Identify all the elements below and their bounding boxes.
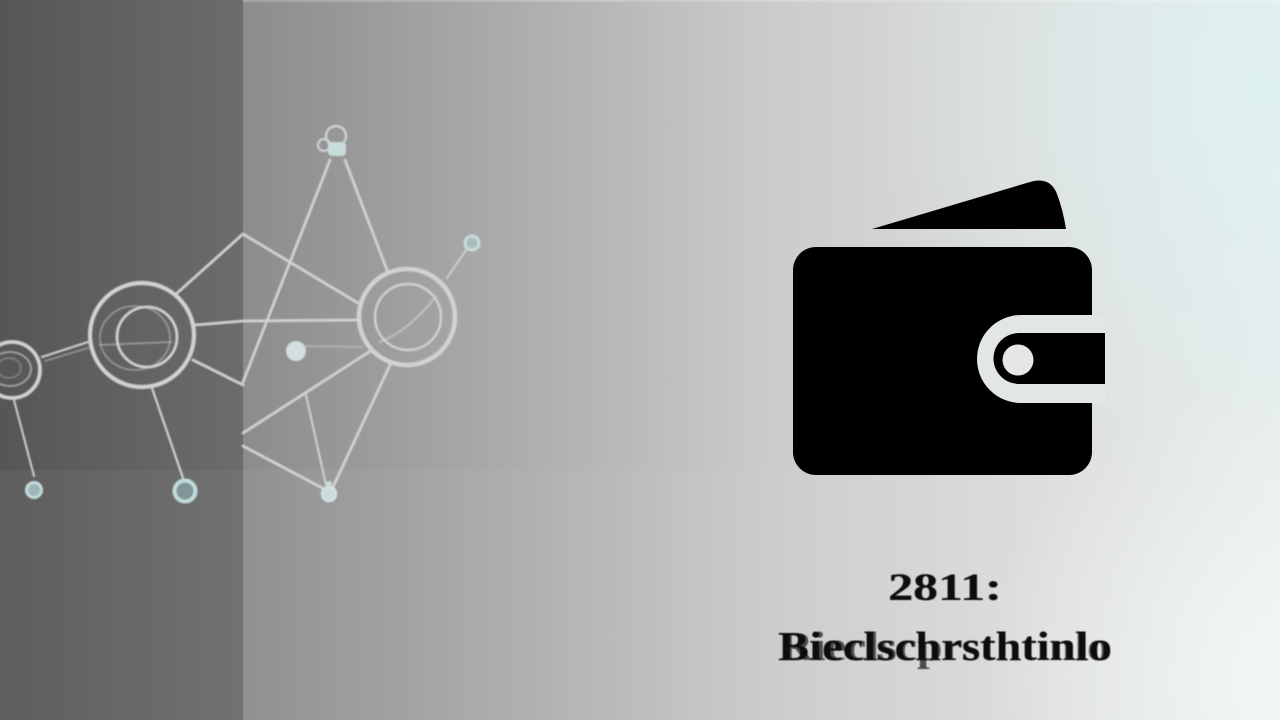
wallet clasp cut-out bbox=[977, 315, 1106, 403]
connecting lines bbox=[14, 160, 466, 490]
wallet clasp tab bbox=[994, 333, 1105, 384]
wallet body bbox=[793, 247, 1092, 475]
year label: 2811: bbox=[889, 566, 1001, 609]
node: bottom right bbox=[322, 481, 336, 501]
node: bottom middle bbox=[174, 480, 196, 502]
caption: Rieclscprsthtinlo bbox=[780, 623, 1110, 669]
node: right large bbox=[359, 269, 455, 365]
node: left large bbox=[90, 283, 194, 387]
node: centre dot bbox=[286, 341, 306, 361]
node: far left bbox=[0, 342, 40, 398]
network diagram bbox=[0, 126, 479, 502]
wallet clasp button bbox=[1002, 344, 1034, 376]
year label: 2811: bbox=[888, 566, 1002, 609]
node: upper right small bbox=[465, 236, 479, 250]
icon: wallet bbox=[793, 180, 1106, 475]
node: top bbox=[318, 126, 346, 156]
wallet flap bbox=[872, 180, 1066, 229]
caption: Bieclschrsthtinlo bbox=[778, 623, 1112, 669]
node: bottom left bbox=[26, 482, 42, 498]
